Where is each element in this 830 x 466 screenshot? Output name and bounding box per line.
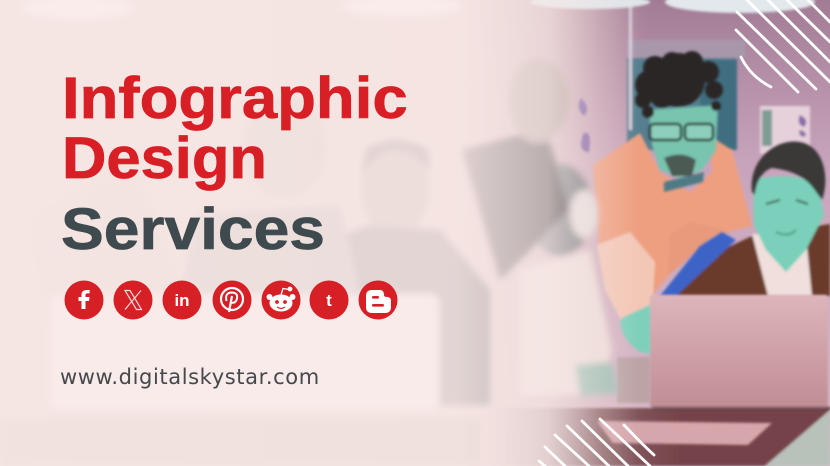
icon: tumblr: t bbox=[326, 291, 332, 310]
decorative white stripes top right bbox=[736, 0, 830, 92]
glass on table bbox=[617, 357, 650, 403]
social icons row bbox=[64, 280, 398, 320]
decorative white stripes bottom bbox=[539, 419, 654, 466]
person: standing man shirt bbox=[593, 133, 752, 322]
title: Infographic Design: Infographic bbox=[62, 66, 408, 130]
icon: X bbox=[114, 280, 152, 320]
icon: blogger bbox=[358, 280, 398, 320]
title: Infographic Design bbox=[62, 66, 408, 191]
title: Infographic Design: Design bbox=[62, 126, 267, 191]
laptop bbox=[650, 295, 830, 409]
icon: linkedin bbox=[162, 280, 202, 320]
person: seated man bbox=[660, 142, 830, 296]
website address: www.digitalskystar.com bbox=[60, 365, 320, 389]
icon: reddit bbox=[262, 280, 300, 320]
icon: pinterest bbox=[212, 280, 252, 320]
subtitle: Services: Services bbox=[61, 197, 325, 261]
faded seated woman and colleagues bbox=[0, 0, 618, 466]
icon: facebook bbox=[64, 280, 104, 320]
person: standing man face and hair bbox=[635, 51, 723, 192]
arm and teal hand bbox=[620, 305, 650, 354]
icon: tumblr bbox=[310, 280, 348, 320]
icon: linkedin: in bbox=[174, 291, 190, 310]
papers on table bbox=[597, 421, 772, 445]
